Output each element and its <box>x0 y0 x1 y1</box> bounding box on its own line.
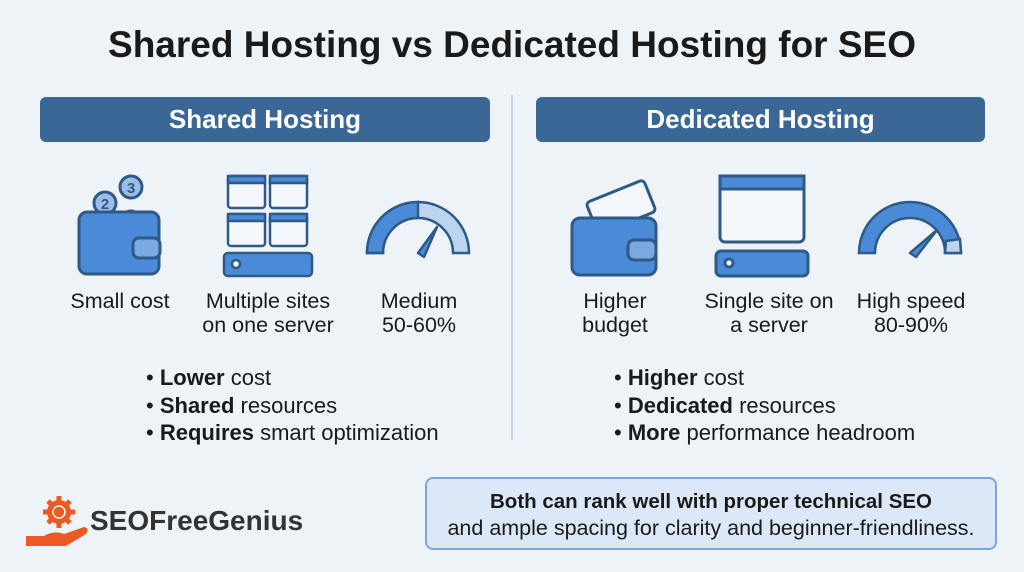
callout: Both can rank well with proper technical SEO <box>490 490 932 513</box>
text: Single site on <box>704 289 834 313</box>
text: Higher <box>583 289 647 313</box>
text: budget <box>582 313 648 337</box>
bullets: dedicated: • More performance headroom <box>614 420 915 445</box>
bullets: dedicated: • Higher cost <box>614 365 744 390</box>
bullets: shared: • Lower cost <box>146 365 271 390</box>
header: shared hosting: Shared Hosting <box>169 104 361 134</box>
bullets: shared <box>146 365 439 445</box>
text: on one server <box>202 313 334 337</box>
header: dedicated hosting <box>536 97 985 142</box>
icons <box>78 174 962 278</box>
text: 80-90% <box>874 313 948 337</box>
text: High speed <box>857 289 965 313</box>
labels: Small cost <box>70 289 170 313</box>
text: a server <box>730 313 808 337</box>
callout: and ample spacing for clarity and beginner-friendliness. <box>447 516 975 540</box>
bullets: dedicated <box>614 365 915 445</box>
header: dedicated hosting: Dedicated Hosting <box>646 104 875 134</box>
icon: high gauge <box>859 202 961 257</box>
icon: medium gauge <box>367 202 469 257</box>
icon: wallet with cards <box>572 180 656 275</box>
icon: wallet with coins <box>79 176 160 274</box>
icon: single server <box>716 176 808 276</box>
text: Multiple sites <box>206 289 330 313</box>
title: Shared Hosting vs Dedicated Hosting for SEO <box>108 24 916 65</box>
callout <box>425 477 997 550</box>
bullets: dedicated: • Dedicated resources <box>614 392 836 418</box>
icon: wallet with coins: 2 <box>101 196 109 213</box>
bullets: shared: • Shared resources <box>146 392 337 418</box>
icon: wallet with coins: 3 <box>127 180 135 197</box>
logo <box>26 496 303 546</box>
text: Medium <box>381 289 457 313</box>
text: 50-60% <box>382 313 456 337</box>
header: shared hosting <box>40 97 490 142</box>
bullets: shared: • Requires smart optimization <box>146 420 439 445</box>
icon: multiple sites server <box>224 176 312 276</box>
logo: SEOFreeGenius <box>90 505 303 536</box>
